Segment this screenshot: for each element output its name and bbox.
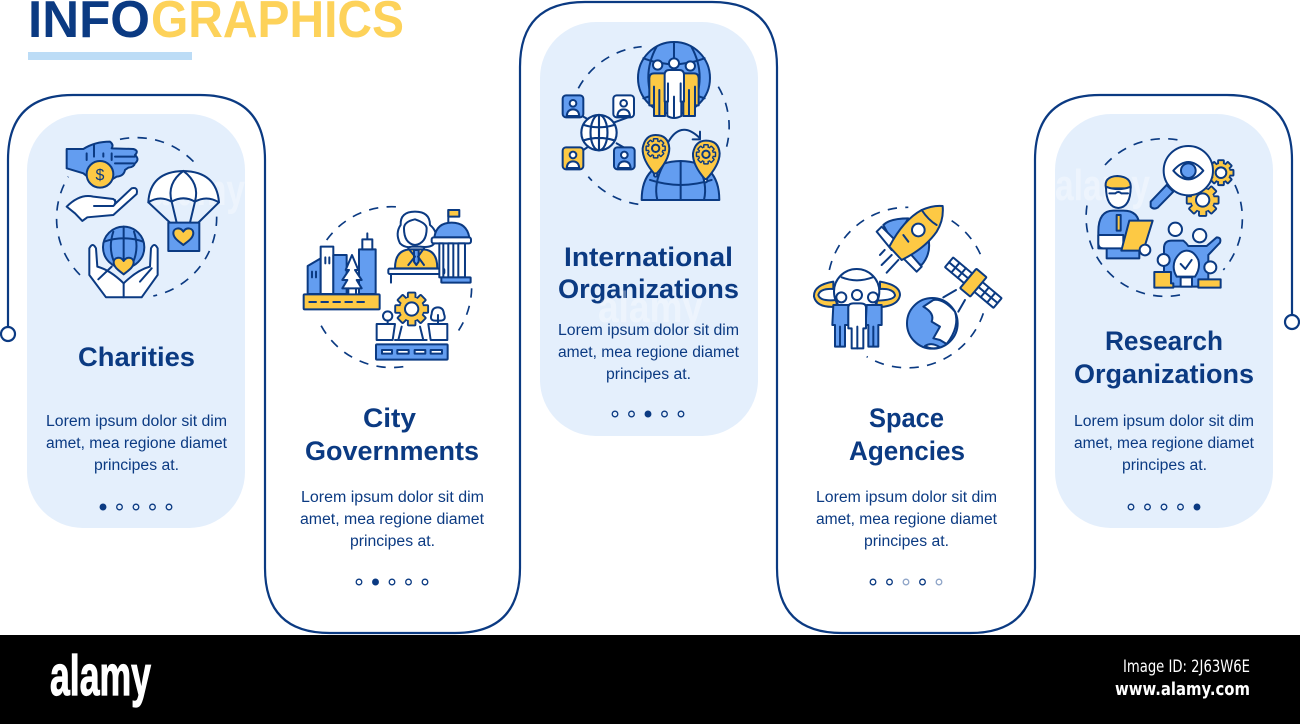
heading: charities: Charities — [78, 342, 195, 372]
heading: space agencies — [849, 403, 965, 466]
body text: research organizations: amet, mea regione diamet — [1074, 435, 1255, 452]
icon: charity hands, parachute and globe: $ — [96, 167, 105, 184]
body text: space agencies: amet, mea regione diamet — [816, 511, 998, 528]
body text: charities: principes at. — [94, 457, 179, 474]
body text: international organizations — [558, 322, 740, 383]
panel: city governments — [300, 207, 485, 585]
heading: city governments — [305, 403, 479, 466]
panel: research organizations — [1055, 114, 1273, 528]
body text: space agencies: Lorem ipsum dolor sit dim — [816, 489, 997, 506]
heading: research organizations: Research — [1105, 326, 1223, 356]
heading: city governments: City — [363, 403, 416, 433]
footer logo: alamy — [50, 644, 151, 708]
body text: research organizations: Lorem ipsum dolor sit dim — [1074, 413, 1254, 430]
heading: international organizations: International — [564, 242, 733, 272]
heading: international organizations: Organizations — [558, 274, 739, 304]
heading: space agencies: Space — [869, 403, 944, 433]
panel: charities — [27, 114, 245, 528]
pagination dots: charities — [100, 504, 172, 510]
footer url: www.alamy.com — [1115, 679, 1250, 700]
panel: international organizations — [540, 22, 758, 436]
body text: international organizations: amet, mea regione diamet — [558, 344, 740, 361]
footer image id: Image ID: 2J63W6E — [1123, 657, 1250, 677]
body text: space agencies: principes at. — [864, 533, 949, 550]
body text: international organizations: principes at. — [606, 366, 691, 383]
pagination dots: space agencies — [870, 579, 942, 585]
panel: research organizations: alamy — [1055, 161, 1150, 210]
body text: international organizations: Lorem ipsum dolor sit dim — [558, 322, 739, 339]
title underline — [28, 52, 192, 60]
body text: research organizations: principes at. — [1122, 457, 1207, 474]
body text: city governments: amet, mea regione diamet — [300, 511, 485, 528]
icon: city, official and gear — [304, 207, 472, 368]
heading: international organizations — [558, 242, 739, 304]
heading: research organizations — [1074, 326, 1254, 389]
title — [28, 0, 404, 49]
body text: city governments: principes at. — [350, 533, 435, 550]
icon: charity hands, parachute and globe — [57, 138, 219, 297]
panel: charities: alamy — [150, 166, 245, 215]
icon: global network and people — [563, 42, 729, 204]
icon: researcher, magnifier, gears and team — [1086, 139, 1242, 296]
body text: city governments — [300, 489, 485, 550]
pagination dots: international organizations — [612, 411, 684, 417]
body text: charities — [46, 413, 228, 474]
body text: research organizations — [1074, 413, 1255, 474]
heading: space agencies: Agencies — [849, 436, 965, 466]
icon: rocket, satellite, planet and people — [814, 206, 1006, 368]
heading: city governments: Governments — [305, 436, 479, 466]
pagination dots: research organizations — [1128, 504, 1200, 510]
body text: space agencies — [816, 489, 998, 550]
body text: charities: amet, mea regione diamet — [46, 435, 228, 452]
heading: research organizations: Organizations — [1074, 359, 1254, 389]
pagination dots: city governments — [356, 579, 428, 585]
body text: city governments: Lorem ipsum dolor sit dim — [301, 489, 484, 506]
footer band — [0, 635, 1300, 724]
panel: international organizations: alamy — [598, 283, 703, 332]
body text: charities: Lorem ipsum dolor sit dim — [46, 413, 227, 430]
panel: space agencies — [814, 206, 1006, 585]
